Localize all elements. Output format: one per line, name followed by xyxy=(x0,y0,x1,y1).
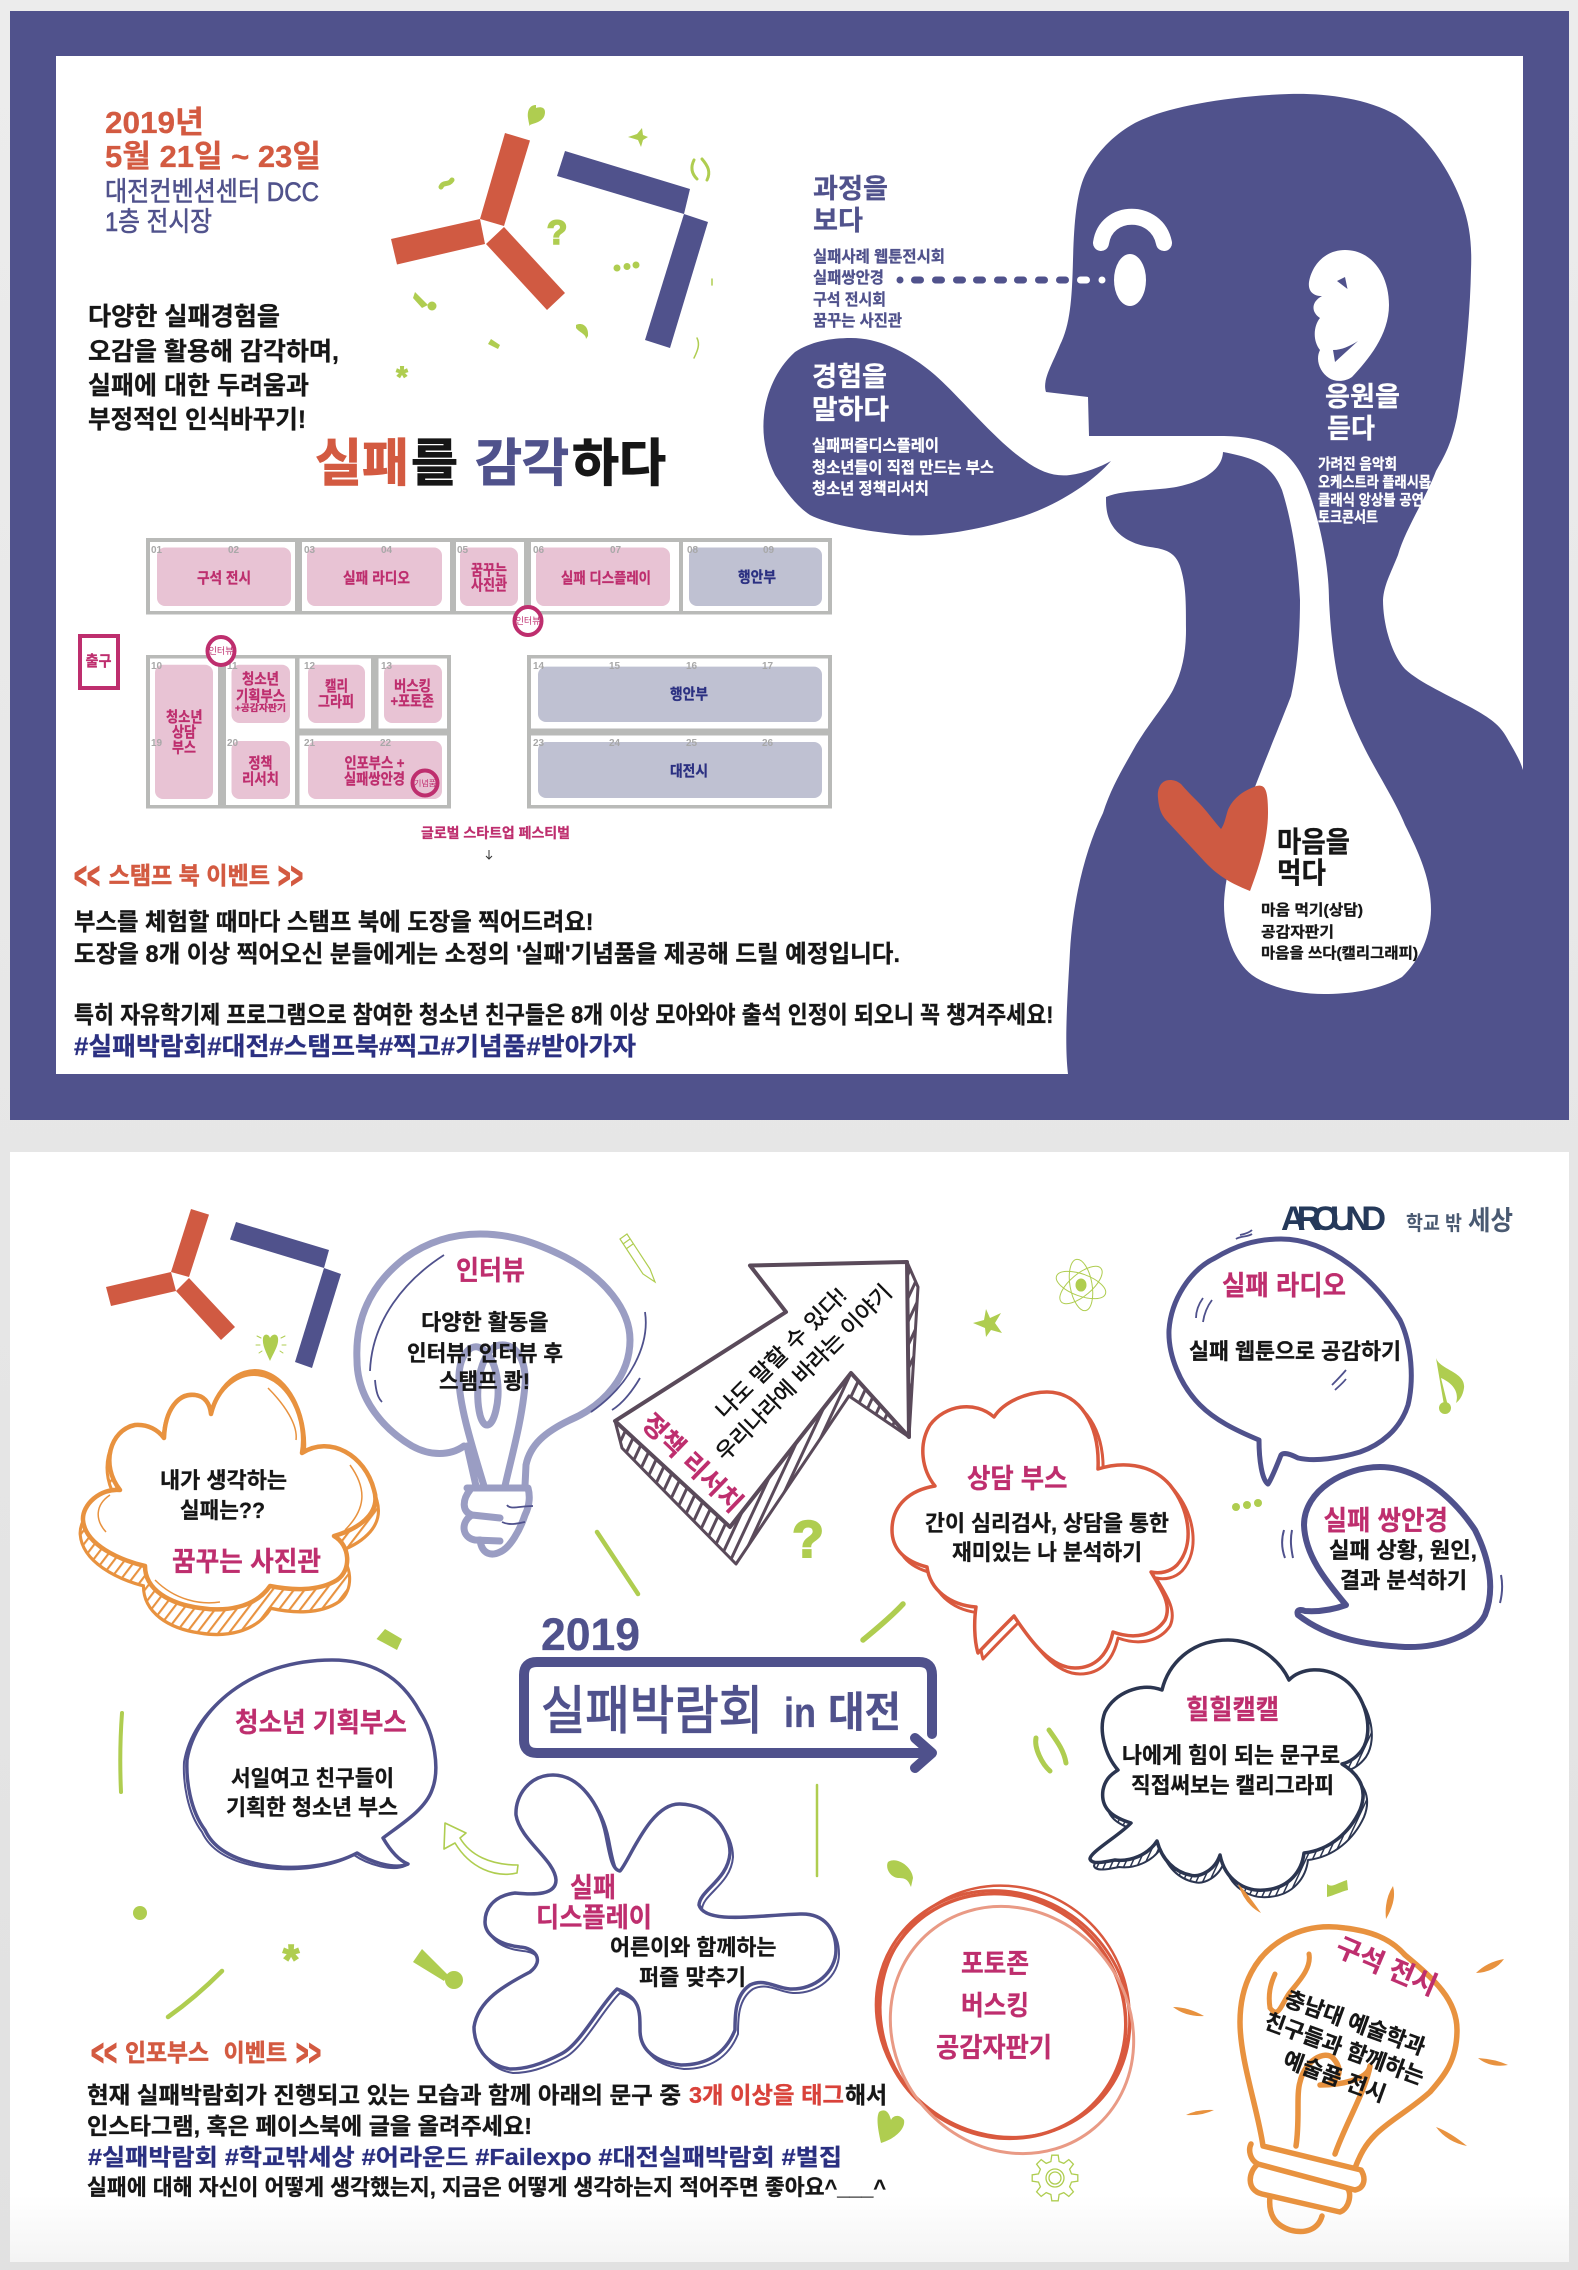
text: eat heart: 먹다 xyxy=(1277,857,1326,890)
panel: booth guide poster xyxy=(10,1152,1569,2262)
floor plan: top row: 01 xyxy=(151,545,163,556)
cloud: healing calligraphy: 직접써보는 캘리그라피 xyxy=(1131,1773,1334,1798)
heading: info booth event: 인포부스 xyxy=(125,2040,209,2067)
bubble: youth planning booth: 서일여고 친구들이 xyxy=(231,1766,394,1791)
heading: info booth event: >> xyxy=(296,2032,321,2073)
title: sensing failure: 를 xyxy=(411,435,458,492)
cloud: dream photo hall: 실패는?? xyxy=(180,1498,265,1523)
text: info booth details: 3개 이상을 태그 xyxy=(689,2082,844,2108)
text: stamp book details: 특히 자유학기제 프로그램으로 참여한 청소년 친구들은 8개 이상 모아와야 출석 인정이 되오니 꼭 챙겨주세요! xyxy=(74,1002,1054,1029)
text: intro copy xyxy=(88,303,339,434)
cloud: healing calligraphy xyxy=(1090,1640,1372,1897)
text: intro copy: 다양한 실패경험을 xyxy=(88,303,280,331)
scribble circle: photo zone busking: 버스킹 xyxy=(961,1991,1029,2021)
floor plan: lower right block: 17 xyxy=(762,661,774,672)
scribble circle: photo zone busking: 포토존 xyxy=(961,1949,1029,1979)
icon: pencil xyxy=(620,1234,655,1282)
floor plan: lower left block: 20 xyxy=(227,738,239,749)
arrow: policy research: 정책 리서치 xyxy=(636,1408,749,1518)
floor plan: top row: 06 xyxy=(533,545,545,556)
title: sensing failure: 감각 xyxy=(475,435,569,492)
cloud: counseling booth: 간이 심리검사, 상담을 통한 xyxy=(925,1511,1169,1536)
text: speak experience: 말하다 xyxy=(812,395,889,425)
panel: sensing failure poster xyxy=(10,11,1569,1120)
title: 2019 failure expo in Daejeon: 실패박람회 xyxy=(541,1683,763,1741)
bulb: structured exhibit xyxy=(1173,1884,1508,2231)
text: info booth details xyxy=(87,2082,887,2200)
floor plan: startup festival direction xyxy=(421,825,570,859)
text: date and venue xyxy=(105,105,321,237)
floor plan: lower left block: 청소년 xyxy=(242,671,279,688)
bubble: youth planning booth xyxy=(184,1660,436,1869)
floor plan: lower right block: 15 xyxy=(609,661,621,672)
text: intro copy: 부정적인 인식바꾸기! xyxy=(88,406,306,434)
floor plan: lower left block: 리서치 xyxy=(242,771,279,788)
text: speak experience: 청소년 정책리서치 xyxy=(812,480,929,498)
green decorations middle: * xyxy=(283,1936,300,1983)
heading: stamp book event: 스탬프 북 이벤트 xyxy=(109,863,270,890)
cloud: dream photo hall: 내가 생각하는 xyxy=(160,1468,287,1493)
green decorations upper: ? xyxy=(792,1511,824,1569)
title: 2019 failure expo in Daejeon: 2019 xyxy=(541,1609,640,1660)
heading: stamp book event: >> xyxy=(278,855,303,896)
cloud: counseling booth xyxy=(892,1392,1193,1674)
floor plan: lower right block: 24 xyxy=(609,738,621,749)
blob: failure display: 디스플레이 xyxy=(536,1903,652,1933)
heading: stamp book event xyxy=(74,855,303,896)
floor plan: lower left block xyxy=(146,655,451,808)
heading: info booth event: << xyxy=(91,2032,117,2073)
text: hear cheers: 듣다 xyxy=(1327,414,1375,444)
bulb: interview: 스탬프 쾅! xyxy=(439,1369,530,1394)
floor plan: top row: 09 xyxy=(763,545,775,556)
floor plan: top row: 행안부 xyxy=(738,569,776,586)
bulb: structured exhibit: 구석 전시 xyxy=(1331,1932,1442,2001)
floor plan: top row: 07 xyxy=(610,545,622,556)
text: speak experience: 청소년들이 직접 만드는 부스 xyxy=(812,459,994,477)
floor plan: top row: 구석 전시 xyxy=(197,570,251,587)
bulb: structured exhibit: 충남대 예술학과 xyxy=(1281,1986,1429,2060)
bulb: structured exhibit: 예술품 전시 xyxy=(1280,2047,1389,2107)
text: hear cheers: 클래식 앙상블 공연 xyxy=(1318,492,1424,509)
text: date and venue: 대전컨벤션센터 DCC xyxy=(105,177,319,207)
text: hear cheers: 응원을 xyxy=(1325,382,1400,412)
floor plan: lower left block: 22 xyxy=(380,738,392,749)
floor plan: lower left block: 11 xyxy=(227,661,238,672)
title: sensing failure: 하다 xyxy=(572,435,666,492)
dotted sight line xyxy=(896,276,1106,284)
text: see the process: 구석 전시회 xyxy=(813,291,886,309)
floor plan: lower left block: +포토존 xyxy=(390,693,434,710)
bubble: failure glasses: 결과 분석하기 xyxy=(1340,1568,1467,1593)
floor plan: exit xyxy=(80,636,118,688)
floor plan: top row: 사진관 xyxy=(471,577,507,594)
floor plan: lower left block: 21 xyxy=(304,738,316,749)
text: stamp book details xyxy=(74,909,1054,1029)
text: intro copy: 실패에 대한 두려움과 xyxy=(88,372,309,400)
blob: failure display: 어른이와 함께하는 xyxy=(610,1935,776,1960)
icon: curved green arrow xyxy=(444,1823,518,1874)
text: hear cheers xyxy=(1318,382,1431,526)
brand: Around logo: 세상 xyxy=(1468,1206,1513,1236)
floor plan: lower left block: 정책 xyxy=(248,755,272,772)
text: intro copy: 오감을 활용해 감각하며, xyxy=(88,338,339,366)
brand: Around logo: 학교 밖 xyxy=(1406,1212,1462,1235)
text: hear cheers: 토크콘서트 xyxy=(1318,509,1378,526)
text: speak experience xyxy=(812,362,994,498)
text: date and venue: 1층 전시장 xyxy=(105,207,212,237)
text: stamp book details: 부스를 체험할 때마다 스탬프 북에 도장을 찍어드려요! xyxy=(74,909,594,936)
floor plan: lower left block: +공감자판기 xyxy=(235,702,286,713)
text: info booth details: 인스타그램, 혹은 페이스북에 글을 올려주세요! xyxy=(87,2113,532,2139)
text: info booth details: 실패에 대해 자신이 어떻게 생각했는지, 지금은 어떻게 생각하는지 적어주면 좋아요^___^ xyxy=(87,2175,886,2200)
text: hear cheers: 오케스트라 플래시몹 xyxy=(1318,474,1431,491)
floor plan: lower left block: 19 xyxy=(151,738,163,749)
cloud: counseling booth: 상담 부스 xyxy=(967,1464,1068,1494)
floor plan: lower right block: 행안부 xyxy=(670,686,708,703)
green decorations upper xyxy=(376,1309,1464,1650)
brand: Around logo xyxy=(1281,1200,1513,1238)
floor plan: lower left block: 그라피 xyxy=(318,694,354,710)
stamp marker: interview left xyxy=(208,637,234,665)
floor plan: lower left block: 부스 xyxy=(172,740,196,756)
bulb: interview: 다양한 활동을 xyxy=(421,1310,548,1335)
cloud: dream photo hall xyxy=(80,1371,378,1634)
text: date and venue: 5월 21일 ~ 23일 xyxy=(105,139,321,174)
heading: info booth event: 이벤트 xyxy=(224,2040,287,2067)
floor plan: top row: 실패 디스플레이 xyxy=(561,570,651,587)
logo: red and blue symbol xyxy=(391,133,708,348)
brand: Around logo: AROUND xyxy=(1281,1200,1386,1238)
floor plan: lower left block: 버스킹 xyxy=(394,678,431,695)
icon: atom xyxy=(1053,1257,1109,1313)
text: see the process: 보다 xyxy=(813,206,863,236)
text: date and venue: 2019년 xyxy=(105,105,204,140)
cloud: counseling booth: 재미있는 나 분석하기 xyxy=(952,1540,1142,1565)
floor plan: top row: 05 xyxy=(457,545,469,556)
text: see the process: 과정을 xyxy=(813,174,888,204)
stamp marker: interview top: 인터뷰 xyxy=(516,616,540,626)
floor plan: lower left block: 청소년 xyxy=(166,709,202,726)
text: see the process: 꿈꾸는 사진관 xyxy=(813,312,902,330)
arrow: policy research: 우리나라에 바라는 이야기 xyxy=(711,1280,897,1466)
title: sensing failure xyxy=(315,435,666,492)
icon: green heart xyxy=(878,2110,904,2143)
title: 2019 failure expo in Daejeon xyxy=(524,1609,932,1768)
logo: red and blue symbol small xyxy=(106,1209,341,1368)
text: eat heart: 마음 먹기(상담) xyxy=(1261,902,1363,919)
scribble circle: photo zone busking: 공감자판기 xyxy=(936,2033,1052,2063)
blob: failure display: 퍼즐 맞추기 xyxy=(639,1965,746,1990)
cloud: dream photo hall: 꿈꾸는 사진관 xyxy=(172,1547,321,1577)
floor plan: exit: 출구 xyxy=(86,653,112,670)
floor plan: top row: 02 xyxy=(228,545,240,556)
green decorations middle xyxy=(120,1713,1348,2017)
floor plan: lower left block: 인포부스 + xyxy=(344,755,405,772)
text: info booth details: #실패박람회 #학교밖세상 #어라운드 #Failexpo #대전실패박람회 #벌집 xyxy=(88,2144,842,2170)
text: speak experience: 실패퍼즐디스플레이 xyxy=(812,437,939,455)
floor plan: lower right block: 14 xyxy=(533,661,545,672)
green decorations around logo: ? xyxy=(547,214,567,252)
icon: eyebrow and eye xyxy=(1101,217,1164,306)
bubble: failure radio: 실패 라디오 xyxy=(1222,1271,1346,1301)
floor plan: lower left block: 실패쌍안경 xyxy=(344,771,405,788)
bulb: structured exhibit: 친구들과 함께하는 xyxy=(1261,2008,1428,2089)
floor plan: lower right block: 26 xyxy=(762,738,774,749)
icon: gear xyxy=(1032,2155,1078,2201)
floor plan: lower left block: 기획부스 xyxy=(236,688,285,705)
floor plan: lower left block: 10 xyxy=(151,661,163,672)
text: info booth details: 해서 xyxy=(845,2082,887,2108)
bubble: youth planning booth: 기획한 청소년 부스 xyxy=(226,1795,398,1820)
text: hear cheers: 가려진 음악회 xyxy=(1318,456,1397,473)
text: speak experience: 경험을 xyxy=(812,362,887,392)
floor plan: lower right block: 25 xyxy=(686,738,698,749)
scribble circle: photo zone busking xyxy=(828,1837,1184,2203)
floor plan xyxy=(80,538,832,859)
icon: red heart xyxy=(1158,780,1268,891)
text: see the process: 실패쌍안경 xyxy=(813,269,884,287)
floor plan: lower right block: 23 xyxy=(533,738,545,749)
floor plan: lower right block: 16 xyxy=(686,661,698,672)
floor plan: startup festival direction: 글로벌 스타트업 페스티벌 xyxy=(421,825,570,841)
floor plan: top row xyxy=(146,538,832,614)
title: sensing failure: 실패 xyxy=(315,435,409,492)
floor plan: lower left block: 12 xyxy=(304,661,316,672)
floor plan: top row: 08 xyxy=(687,545,699,556)
bulb: interview xyxy=(357,1234,646,1554)
text: info booth details: 현재 실패박람회가 진행되고 있는 모습과 함께 아래의 문구 중 xyxy=(87,2082,681,2108)
arrow: policy research xyxy=(615,1262,918,1564)
floor plan: top row: 꿈꾸는 xyxy=(471,562,507,579)
text: eat heart xyxy=(1261,826,1418,962)
text: stamp book details: 도장을 8개 이상 찍어오신 분들에게는 소정의 '실패'기념품을 제공해 드릴 예정입니다. xyxy=(74,941,900,968)
title: 2019 failure expo in Daejeon: 대전 xyxy=(828,1689,901,1736)
bubble: youth planning booth: 청소년 기획부스 xyxy=(235,1708,407,1738)
stamp marker: interview top xyxy=(514,607,542,635)
blob: failure display: 실패 xyxy=(570,1873,616,1903)
title: 2019 failure expo in Daejeon: in xyxy=(784,1689,816,1736)
bulb: interview: 인터뷰! 인터뷰 후 xyxy=(407,1341,563,1366)
stamp marker: souvenir xyxy=(412,770,438,796)
floor plan: lower left block: 캘리 xyxy=(325,678,348,695)
cloud: healing calligraphy: 힐힐캘캘 xyxy=(1186,1695,1279,1725)
stamp marker: souvenir: 기념품 xyxy=(414,779,436,788)
icon: ear xyxy=(1309,250,1389,381)
arrow: policy research: 나도 말할 수 있다! xyxy=(711,1283,852,1424)
bubble: failure glasses xyxy=(1282,1467,1502,1647)
icon: green heart with rays xyxy=(256,1335,286,1361)
blob: failure display xyxy=(474,1775,839,2073)
text: eat heart: 마음을 쓰다(캘리그래피) xyxy=(1261,945,1418,962)
heading: info booth event xyxy=(91,2032,321,2073)
text: see the process: 실패사례 웹툰전시회 xyxy=(813,248,945,266)
floor plan: top row: 실패 라디오 xyxy=(343,570,410,587)
green decorations around logo xyxy=(396,105,712,394)
bubble: failure radio xyxy=(1169,1230,1411,1484)
floor plan: top row: 03 xyxy=(304,545,316,556)
floor plan: lower right block xyxy=(527,655,832,808)
head and body silhouette xyxy=(1045,94,1523,1074)
floor plan: lower left block: 상담 xyxy=(172,724,196,741)
floor plan: lower left block: 13 xyxy=(381,661,393,672)
bubble: failure glasses: 실패 상황, 원인, xyxy=(1329,1538,1477,1563)
cloud: healing calligraphy: 나에게 힘이 되는 문구로 xyxy=(1122,1743,1340,1768)
stamp marker: interview left: 인터뷰 xyxy=(209,646,233,656)
floor plan: lower right block: 대전시 xyxy=(670,763,708,780)
floor plan: top row: 04 xyxy=(381,545,393,556)
bulb: interview: 인터뷰 xyxy=(456,1256,525,1286)
bubble: failure radio: 실패 웹툰으로 공감하기 xyxy=(1189,1339,1401,1364)
speech bubble xyxy=(763,338,1111,535)
text: eat heart: 마음을 xyxy=(1277,826,1350,859)
text: stamp book hashtags: #실패박람회#대전#스탬프북#찍고#기념품#받아가자 xyxy=(74,1033,636,1061)
green decorations around logo: * xyxy=(396,361,408,394)
text: eat heart: 공감자판기 xyxy=(1261,924,1334,941)
text: see the process xyxy=(813,174,945,330)
bubble: failure glasses: 실패 쌍안경 xyxy=(1324,1506,1448,1536)
heading: stamp book event: << xyxy=(74,855,100,896)
